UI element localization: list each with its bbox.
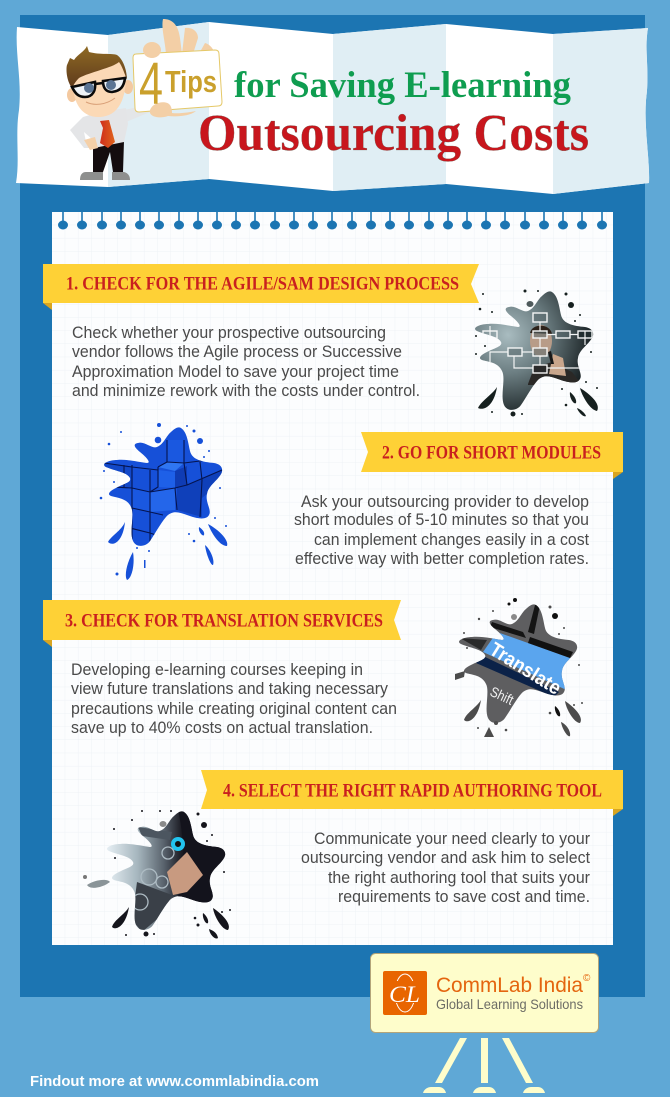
tip 1 ribbon: 1. CHECK FOR THE AGILE/SAM DESIGN PROCESS (66, 274, 459, 294)
tip 1 text (72, 323, 420, 400)
tip 2 ribbon: 2. GO FOR SHORT MODULES (382, 442, 601, 464)
tip 2 text (294, 492, 589, 568)
title line: Outsourcing Costs: Outsourcing Costs (198, 105, 589, 162)
tip 3 splash image: translate key (454, 598, 584, 737)
tip 3 text (71, 660, 397, 737)
glasses (72, 78, 125, 97)
white tips card (133, 50, 222, 112)
tip 4 ribbon: 4. SELECT THE RIGHT RAPID AUTHORING TOOL (223, 780, 602, 802)
cartoon man holding tips card (67, 19, 222, 180)
pointing hand at waist (84, 137, 98, 150)
tip 3 text: view future translations and taking necessary (71, 679, 388, 698)
tip 2 splash image: blue cubes (99, 421, 229, 580)
logo mark (383, 971, 427, 1015)
title line: for Saving E-learning: for Saving E-learning (234, 65, 571, 106)
tip 3 text: precautions while creating original content can (71, 699, 397, 718)
tip 4 text (301, 829, 590, 906)
word Tips: Tips (165, 64, 217, 99)
ears (67, 80, 133, 102)
tip 4 text: Communicate your need clearly to your (314, 829, 590, 848)
head (73, 58, 126, 117)
key label Shift: Shift (488, 683, 516, 708)
company name: CommLab India (436, 974, 583, 997)
tip 4 text: requirements to save cost and time. (338, 887, 590, 906)
company tagline: Global Learning Solutions (436, 996, 583, 1012)
tip 3 ribbon (43, 600, 401, 647)
tip 4 text: the right authoring tool that suits your (328, 868, 590, 887)
copyright mark: © (583, 973, 591, 984)
lower hand (150, 102, 196, 117)
tip 4 splash image: hand touching gear (83, 805, 232, 940)
tip 2 text: effective way with better completion rates. (295, 549, 589, 568)
tip 3 ribbon: 3. CHECK FOR TRANSLATION SERVICES (65, 610, 383, 632)
tip 2 ribbon (361, 432, 623, 479)
tip 2 text: short modules of 5-10 minutes so that you (294, 510, 589, 529)
arm to card (124, 105, 150, 122)
tip 1 ribbon (43, 264, 479, 310)
eyes (84, 83, 94, 93)
tie (100, 120, 115, 148)
key label Translate: Translate (485, 639, 565, 700)
notebook sheet (52, 212, 613, 945)
tip 1 splash image: flowchart and businessman (475, 290, 598, 416)
logo mark: CL (389, 982, 420, 1007)
tip 4 text: outsourcing vendor and ask him to select (301, 848, 590, 867)
tip 1 text: Check whether your prospective outsourcing (72, 323, 386, 342)
tip 1 text: Approximation Model to save your project time (72, 362, 399, 381)
tip 2 text: Ask your outsourcing provider to develop (301, 492, 589, 511)
folded paper title banner (16, 22, 649, 194)
tip 1 text: and minimize rework with the costs under control. (72, 381, 420, 400)
smile (86, 98, 115, 104)
trousers (93, 141, 124, 172)
signboard stand (423, 1038, 545, 1093)
hair (67, 46, 127, 88)
tip 2 text: can implement changes easily in a cost (314, 530, 589, 549)
shirt (70, 108, 128, 148)
tip 3 text: save up to 40% costs on actual translation. (71, 718, 373, 737)
shoes (80, 172, 130, 180)
big number 4: 4 (139, 51, 163, 117)
logo signboard (370, 954, 598, 1032)
tip 4 ribbon (201, 770, 623, 816)
tip 1 text: vendor follows the Agile process or Successive (72, 342, 402, 361)
thumb (143, 42, 161, 58)
tip 3 text: Developing e-learning courses keeping in (71, 660, 363, 679)
back fingers (162, 19, 214, 54)
footer link text: Findout more at www.commlabindia.com (30, 1073, 319, 1090)
